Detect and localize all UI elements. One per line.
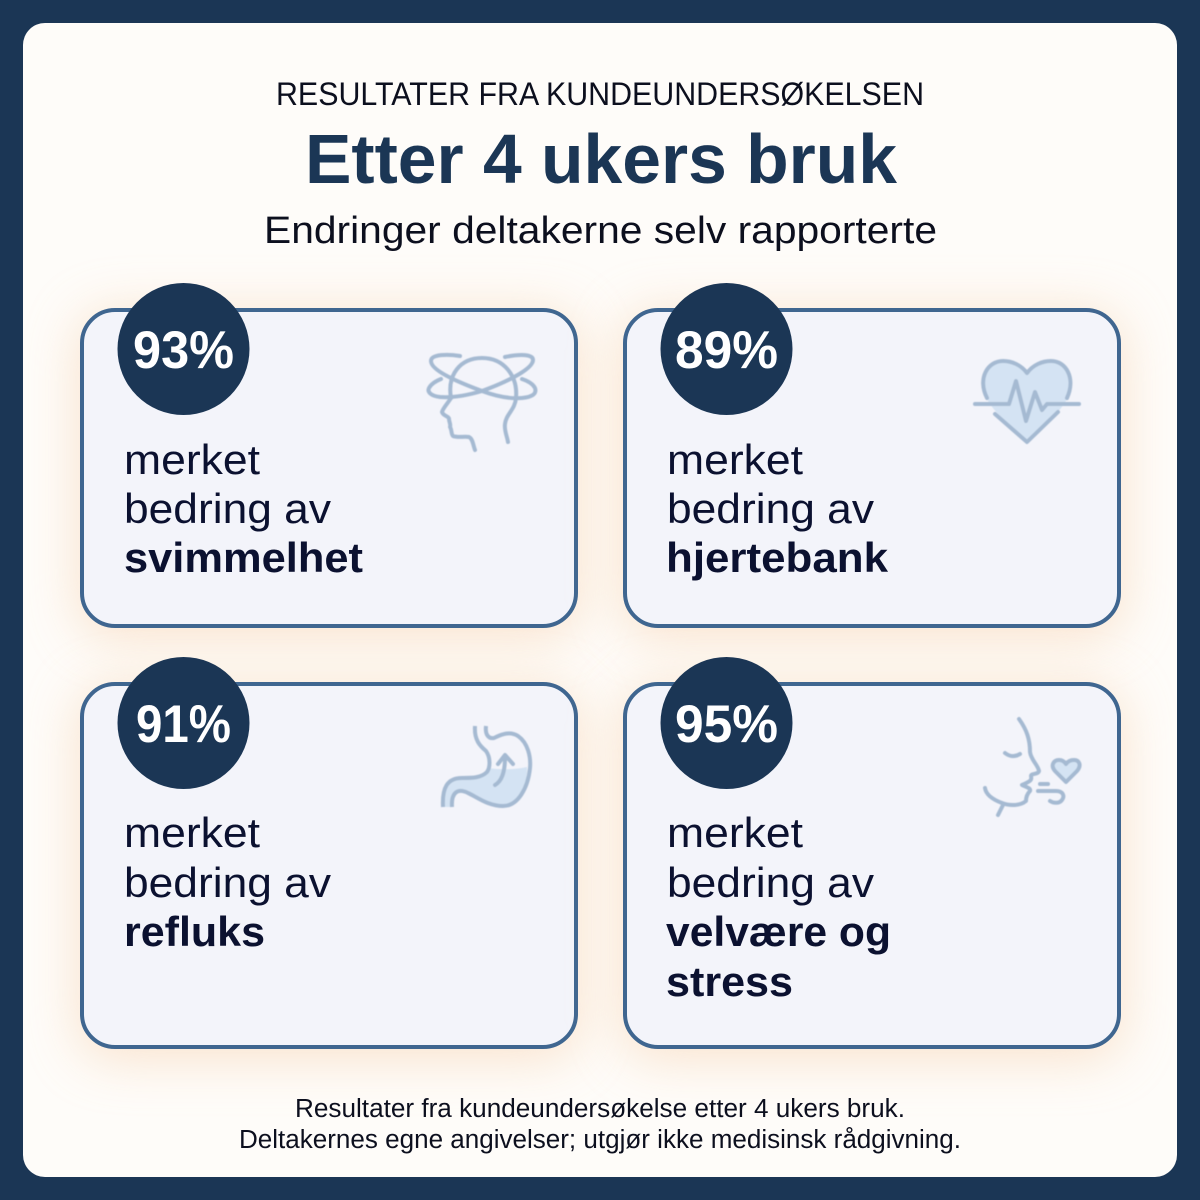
text: merket bedring av velvaere og stress: bedring av [667, 859, 874, 906]
icon: heart with pulse [975, 361, 1079, 442]
text: merket bedring av velvaere og stress [666, 809, 891, 1005]
badge: 91% [118, 657, 250, 789]
badge: 95%: 95% [675, 695, 778, 754]
panel: refluks [78, 657, 580, 1059]
badge: 93%: 93% [133, 321, 234, 380]
text: merket bedring av hjertebank: merket [667, 436, 803, 483]
text: merket bedring av refluks: refluks [124, 908, 265, 955]
title: Etter 4 ukers bruk [305, 120, 897, 198]
eyebrow heading: RESULTATER FRA KUNDEUNDERSØKELSEN [276, 76, 924, 112]
text: merket bedring av refluks: merket [124, 809, 260, 856]
text: merket bedring av velvaere og stress: merket [667, 809, 803, 856]
badge: 91%: 91% [136, 695, 231, 754]
text: merket bedring av svimmelhet [124, 436, 363, 581]
text: merket bedring av svimmelhet: bedring av [124, 485, 331, 532]
text: merket bedring av svimmelhet: merket [124, 436, 260, 483]
badge: 89%: 89% [675, 321, 778, 380]
text: merket bedring av hjertebank [666, 436, 889, 581]
icon: dizzy head [428, 355, 535, 450]
text: merket bedring av svimmelhet: svimmelhet [124, 534, 363, 581]
text: merket bedring av hjertebank: bedring av [667, 485, 874, 532]
text: merket bedring av velvaere og stress: stress [666, 958, 793, 1005]
icon: face breathing with heart [985, 719, 1080, 815]
text: merket bedring av velvaere og stress: velvære og [666, 908, 891, 955]
subtitle: Endringer deltakerne selv rapporterte [264, 210, 937, 252]
header [264, 76, 937, 252]
badge: 89% [660, 283, 792, 415]
text: merket bedring av hjertebank: hjertebank [666, 534, 889, 581]
footer note [239, 1095, 961, 1154]
panel: hjertebank [621, 283, 1123, 638]
footer note: Deltakernes egne angivelser; utgjør ikke medisinsk rådgivning. [239, 1126, 961, 1154]
icon: stomach with reflux [443, 726, 530, 807]
footer note: Resultater fra kundeundersøkelse etter 4 ukers bruk. [295, 1095, 905, 1123]
badge: 93% [118, 283, 250, 415]
text: merket bedring av refluks: bedring av [124, 859, 331, 906]
panel: svimmelhet [78, 283, 580, 638]
panel: velvaere og stress [621, 657, 1123, 1059]
badge: 95% [660, 657, 792, 789]
text: merket bedring av refluks [124, 809, 331, 955]
